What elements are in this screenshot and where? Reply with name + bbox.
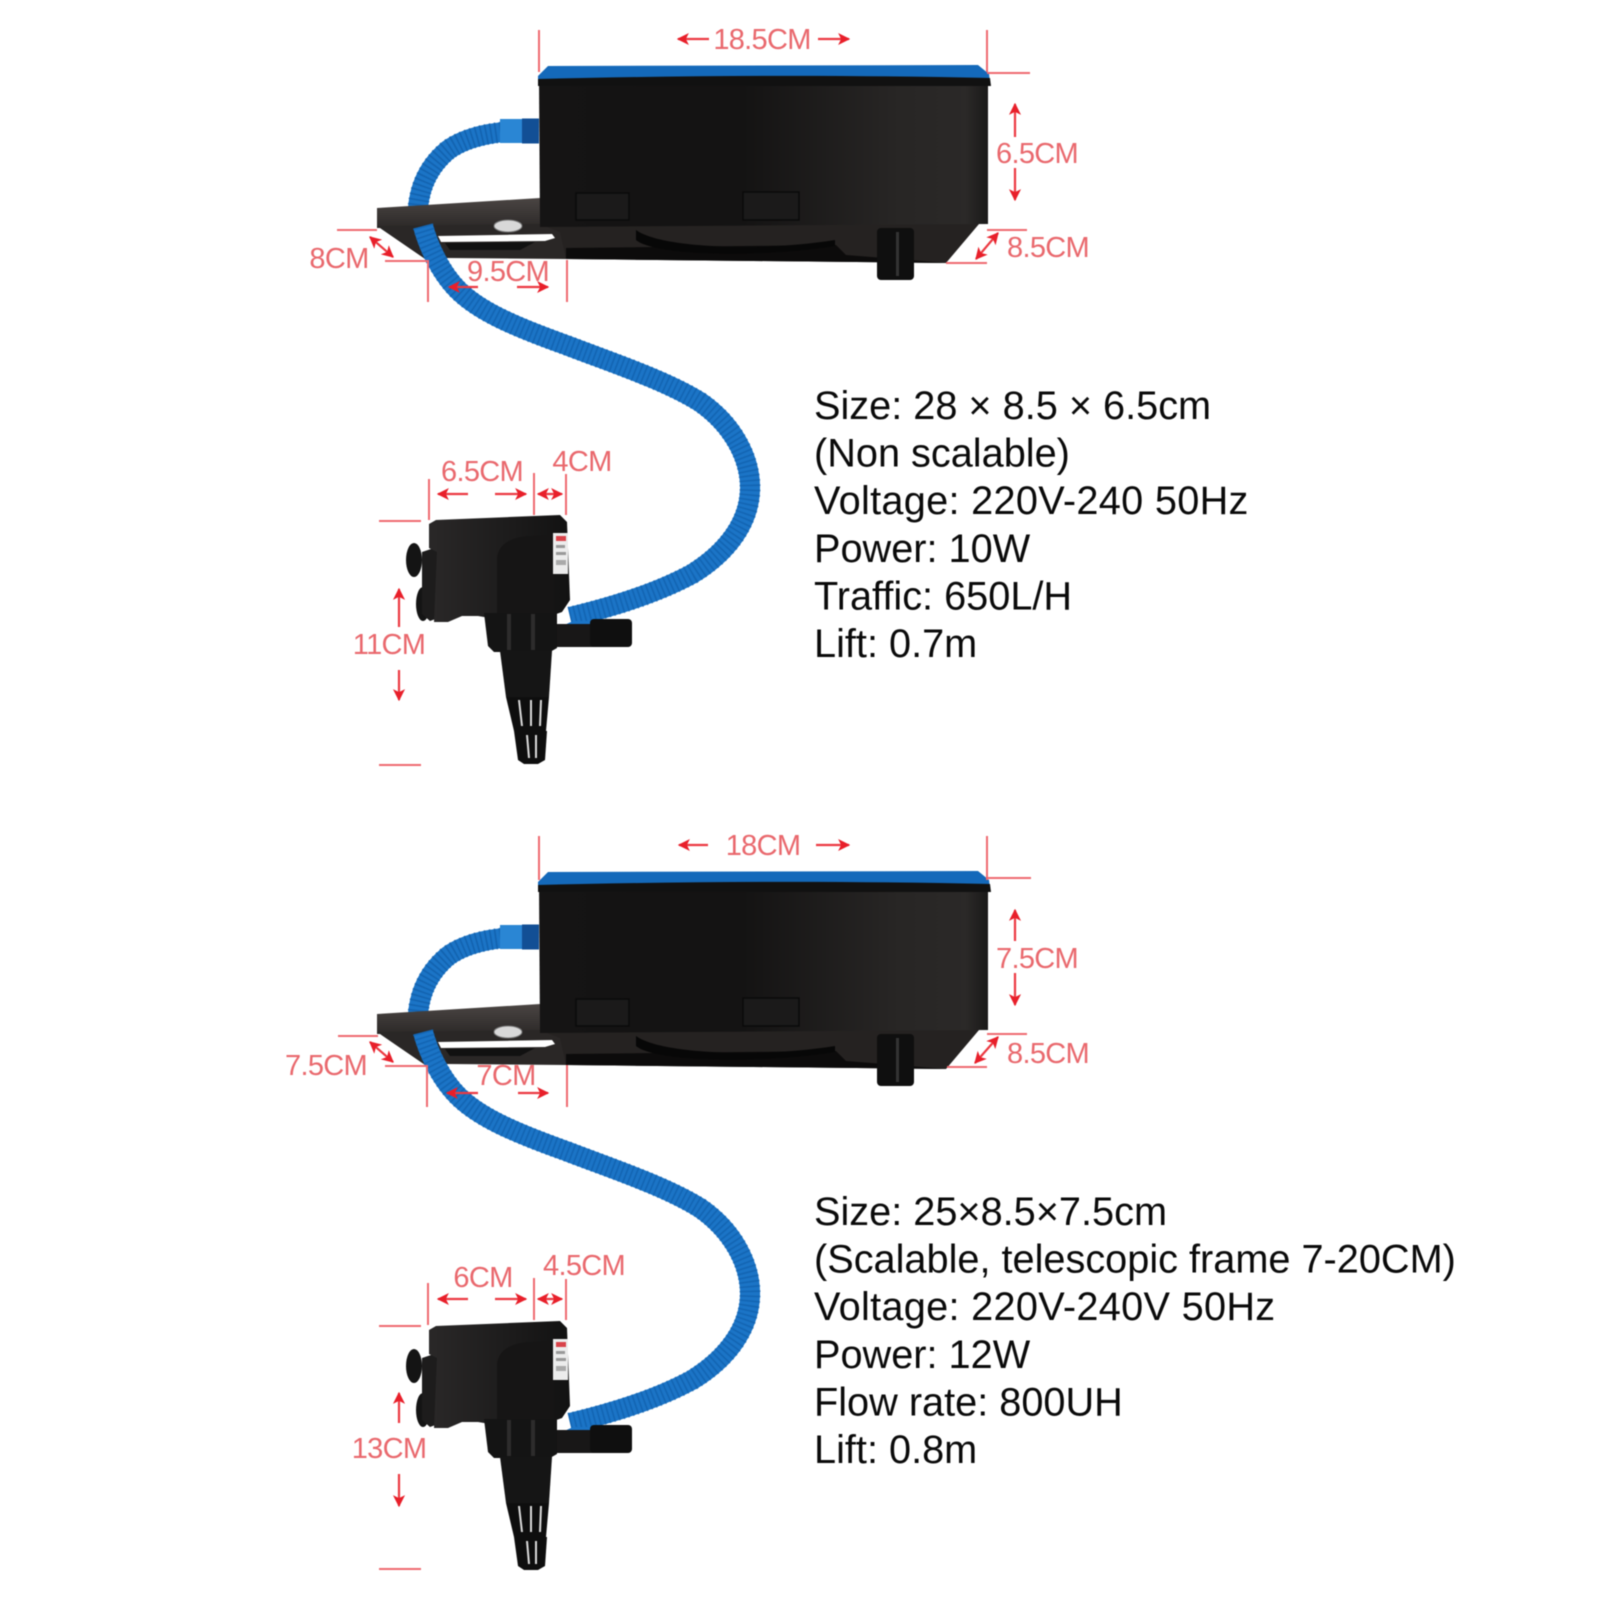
- dimension: box depth 8.5CM: 8.5CM: [1007, 1038, 1089, 1070]
- dimension: box height 7.5CM: [996, 910, 1078, 1005]
- spec text: model 2: Size: 25×8.5×7.5cm: [814, 1190, 1167, 1234]
- spec text: model 1: Traffic: 650L/H: [814, 574, 1072, 618]
- filter box with blue lid and mounting bracket: [377, 65, 991, 280]
- spec text: model 1: Power: 10W: [814, 527, 1031, 571]
- dimension: pump width 6CM: [428, 1262, 534, 1325]
- dimension: pump height 11CM: [353, 521, 425, 765]
- dimension: pump width 6.5CM: [429, 456, 534, 520]
- dimension: pump height 13CM: [352, 1326, 426, 1569]
- dimension: bracket width 9.5CM: [428, 256, 567, 302]
- unit 2: filter box and pump product image: [377, 871, 991, 1570]
- corrugated blue hose: [423, 1032, 750, 1423]
- dimension: pump depth 4CM: 4CM: [552, 446, 612, 478]
- dimension: bracket depth 7.5CM: 7.5CM: [285, 1050, 367, 1082]
- dimension: box height 6.5CM: 6.5CM: [996, 138, 1078, 170]
- dimension: box width 18.5CM: [539, 24, 1030, 73]
- spec text: model 1: [814, 384, 1249, 666]
- dimension: box depth 8.5CM: 8.5CM: [1007, 232, 1089, 264]
- spec text: model 1: Voltage: 220V-240 50Hz: [814, 479, 1249, 523]
- dimension: bracket width 7CM: 7CM: [476, 1060, 536, 1092]
- dimension: pump height 11CM: 11CM: [353, 629, 425, 661]
- dimension: pump height 13CM: 13CM: [352, 1433, 426, 1465]
- dimension: box height 6.5CM: [996, 104, 1078, 200]
- spec text: model 2: Flow rate: 800UH: [814, 1380, 1123, 1424]
- dimension: pump depth 4.5CM: 4.5CM: [543, 1250, 625, 1282]
- spec text: model 1: (Non scalable): [814, 432, 1070, 476]
- spec text: model 1: Lift: 0.7m: [814, 622, 977, 666]
- dimension: box width 18CM: 18CM: [726, 830, 800, 862]
- corrugated blue hose: [423, 226, 750, 617]
- dimension: bracket depth 8CM: 8CM: [309, 243, 369, 275]
- dimension: pump width 6.5CM: 6.5CM: [441, 456, 523, 488]
- hose upper section: [418, 131, 539, 208]
- dimension: box depth 8.5CM: [946, 230, 1089, 264]
- spec text: model 2: [814, 1190, 1456, 1472]
- dimension: box width 18.5CM: 18.5CM: [713, 24, 811, 56]
- dimension: box depth 8.5CM: [947, 1034, 1089, 1070]
- dimension: bracket depth 7.5CM: [285, 1036, 427, 1082]
- dimension: bracket depth 8CM: [309, 230, 428, 275]
- dimension: bracket width 9.5CM: 9.5CM: [467, 256, 549, 288]
- dimension: box width 18CM: [539, 830, 1031, 880]
- submersible pump: [406, 1321, 632, 1570]
- hose upper section: [418, 937, 539, 1014]
- submersible pump: [406, 515, 632, 764]
- dimension: bracket width 7CM: [427, 1060, 567, 1107]
- dimension: box height 7.5CM: 7.5CM: [996, 943, 1078, 975]
- dimension: pump depth 4.5CM: [538, 1250, 625, 1320]
- unit 1: filter box and pump product image: [377, 65, 991, 764]
- spec text: model 1: Size: 28 × 8.5 × 6.5cm: [814, 384, 1211, 428]
- spec text: model 2: (Scalable, telescopic frame 7-20CM): [814, 1238, 1456, 1282]
- dimension: pump width 6CM: 6CM: [453, 1262, 513, 1294]
- spec text: model 2: Voltage: 220V-240V 50Hz: [814, 1285, 1275, 1329]
- spec text: model 2: Lift: 0.8m: [814, 1428, 977, 1472]
- filter box with blue lid and mounting bracket: [377, 871, 991, 1086]
- dimension: pump depth 4CM: [538, 446, 612, 515]
- spec text: model 2: Power: 12W: [814, 1333, 1031, 1377]
